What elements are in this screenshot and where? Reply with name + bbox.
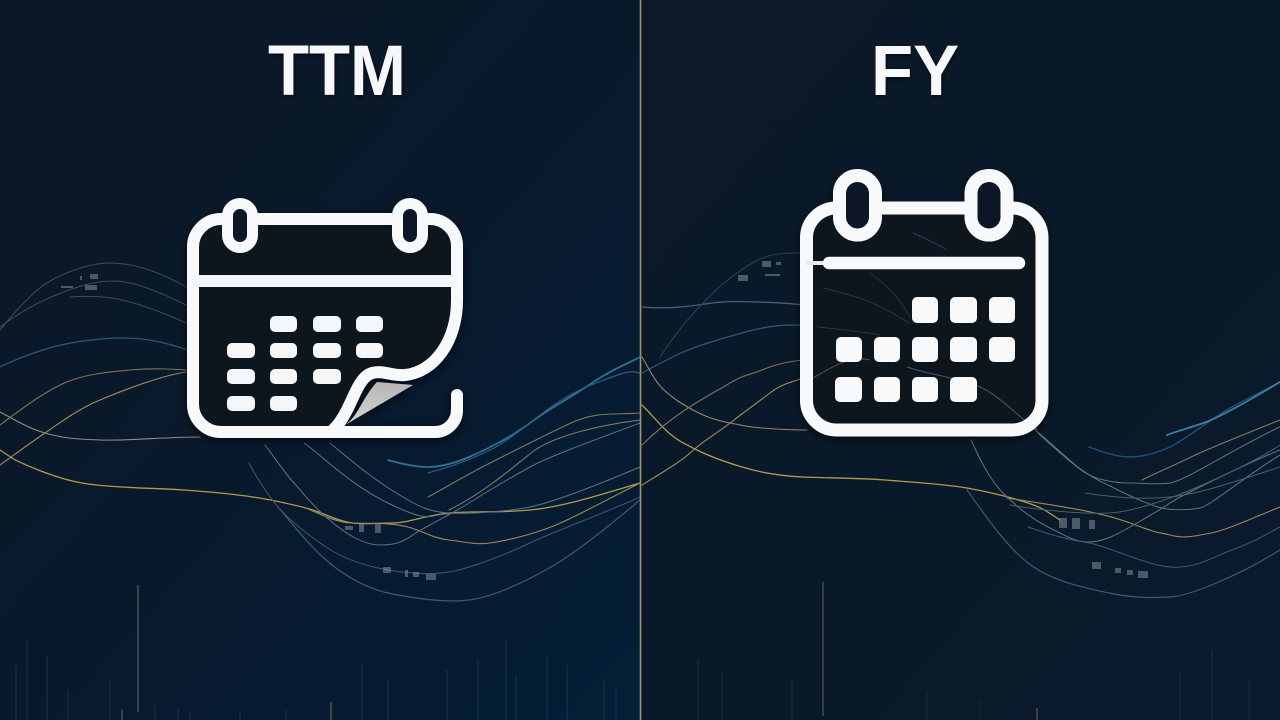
- tiny chart annotations: TTM: [61, 274, 436, 580]
- faint wave lines seen through the calendar: [813, 233, 1037, 430]
- bottom vertical streaks, left panel: [16, 640, 616, 720]
- vertical marker lines: [122, 582, 1037, 720]
- heading: FY: FY: [871, 32, 959, 111]
- icon: FY calendar: [806, 176, 1042, 430]
- heading: TTM: TTM: [268, 32, 406, 111]
- center divider line: [640, 0, 642, 720]
- panel: FY background: [640, 0, 1280, 720]
- icon part: date tiles: [227, 316, 383, 411]
- icon part: date tiles: [835, 297, 1015, 402]
- icon part: page fold: [345, 382, 413, 425]
- icon: TTM calendar with curled page: [193, 204, 457, 432]
- chart lines: FY waves: [642, 253, 1280, 598]
- panel: TTM background: [0, 0, 640, 720]
- bottom vertical streaks, right panel: [698, 650, 1249, 720]
- tiny chart annotations: FY: [738, 261, 1148, 578]
- chart lines: TTM waves: [0, 263, 640, 601]
